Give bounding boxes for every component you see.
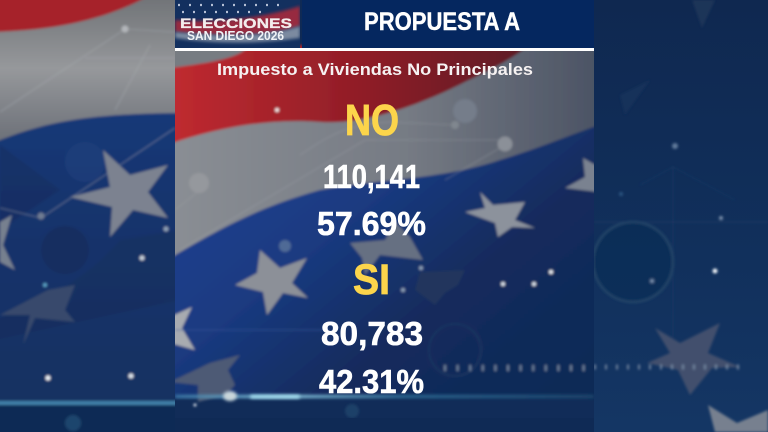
horizon glow line [175,391,594,401]
tick row [594,364,740,370]
star: bottom corner [708,405,768,432]
title: PROPUESTA A [364,8,520,36]
SI percent: 42.31% [319,363,424,400]
tick row in panel [444,365,594,371]
result: NO [317,96,426,242]
logo flag band [175,6,300,35]
decorative ring [593,222,673,302]
NO percent: 57.69% [317,205,426,242]
star: dim center right [416,271,462,303]
header: election logo [175,0,300,48]
left background flag [0,0,180,432]
star: panel left edge [170,307,195,350]
center panel flag background [170,45,599,418]
SI label: SI [353,256,390,304]
star: large left [70,150,168,237]
star: large lower left [235,250,308,315]
header: title bar [302,0,594,48]
header rule [175,48,594,51]
subtitle: Impuesto a Viviendas No Principales [217,60,533,79]
NO label: NO [345,96,399,145]
result: SI [319,256,424,400]
star: faint left [0,285,75,345]
star: dim lower left [170,355,240,402]
right background panel [593,0,768,432]
star: behind figures [350,222,423,275]
logo flag stars [178,5,280,12]
logo title: ELECCIONES [180,15,292,31]
star: center right [465,192,535,237]
SI votes: 80,783 [321,315,423,352]
star: upper right panel [565,158,599,192]
logo subtitle: SAN DIEGO 2026 [187,28,284,43]
NO votes: 110,141 [323,158,420,195]
star: lower right [647,323,740,395]
star: clipped left [0,215,15,270]
